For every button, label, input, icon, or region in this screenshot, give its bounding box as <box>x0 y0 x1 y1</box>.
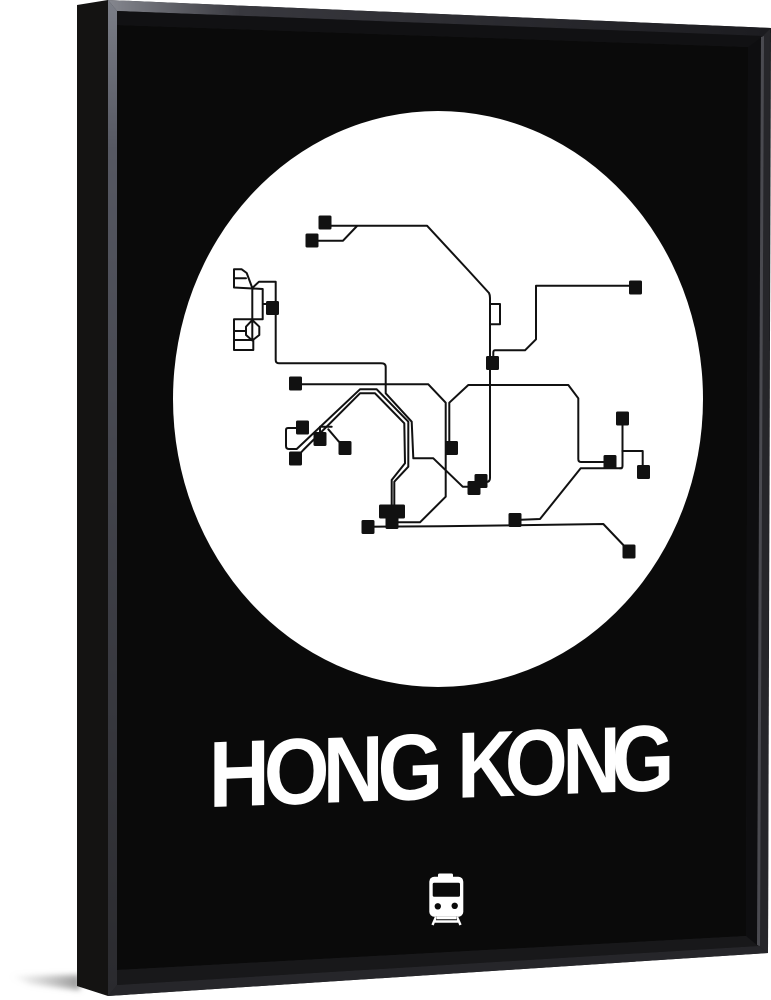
line: main west line <box>276 308 473 487</box>
line: centre to south <box>296 384 446 522</box>
line: west inner double track <box>296 393 405 505</box>
black canvas <box>117 25 748 970</box>
stations <box>266 216 650 558</box>
line: north-west branch <box>312 226 357 241</box>
line: stub <box>490 304 500 324</box>
line: east branches <box>620 418 643 471</box>
transit map <box>234 216 650 558</box>
line: north-west to centre <box>325 226 490 482</box>
frame right inner highlight <box>757 36 764 946</box>
frame left edge <box>108 0 117 996</box>
title <box>209 705 674 827</box>
frame bottom edge <box>108 946 768 996</box>
icon: train <box>429 874 463 925</box>
line: airport loops <box>234 269 276 350</box>
title: KONG <box>457 705 674 818</box>
floor shadow <box>10 975 80 990</box>
line: north-east <box>493 286 636 362</box>
line: south <box>368 524 629 551</box>
frame top edge <box>108 0 771 36</box>
inner recess bottom <box>117 936 758 985</box>
line: east to south <box>515 468 622 520</box>
frame right edge <box>758 29 770 953</box>
white circle <box>173 111 703 687</box>
inner recess right <box>746 36 763 946</box>
line: centre loop to east <box>449 385 605 462</box>
line: west branch <box>320 427 345 448</box>
title: HONG <box>209 713 443 827</box>
frame side face <box>77 0 108 996</box>
inner recess top <box>117 11 763 47</box>
line: west outer double track <box>286 389 408 505</box>
